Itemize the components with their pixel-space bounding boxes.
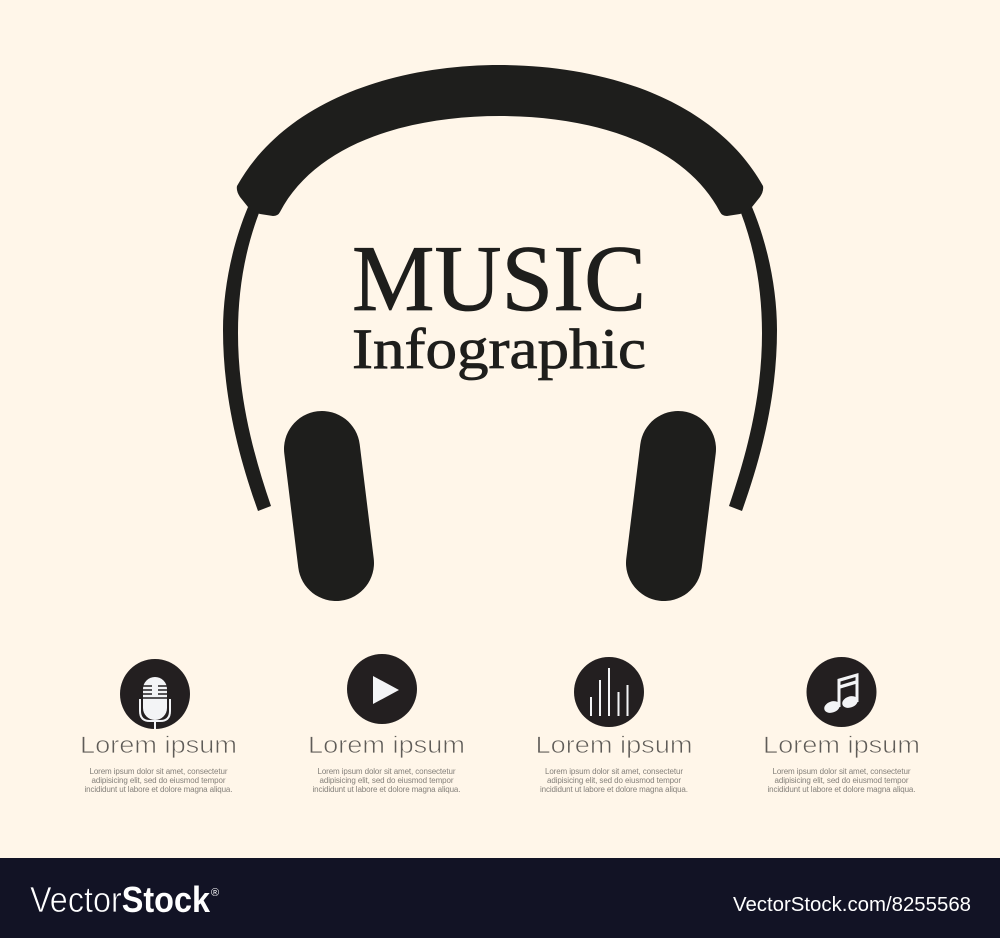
description: adipisicing elit, sed do eiusmod tempor [320,776,454,785]
description: incididunt ut labore et dolore magna aliqua. [768,785,916,794]
description: Lorem ipsum dolor sit amet, consectetur [90,767,228,776]
left wire [223,207,271,511]
title: MUSIC: MUSIC [352,227,646,331]
description: adipisicing elit, sed do eiusmod tempor [547,776,681,785]
description [768,767,916,794]
description: Lorem ipsum dolor sit amet, consectetur [545,767,683,776]
description: Lorem ipsum dolor sit amet, consectetur [772,767,911,776]
description: adipisicing elit, sed do eiusmod tempor [774,776,909,785]
item 3: equalizer [536,657,692,794]
description [540,767,688,794]
registered mark: ® [211,887,219,899]
footer bar [0,858,1000,938]
footer logo: VectorStock [30,879,211,920]
description [312,767,460,794]
icon: microphone [120,659,190,729]
icon: music note [806,657,876,727]
footer id: VectorStock.com/8255568 [733,894,971,916]
headphones illustration [223,65,777,563]
item 1: microphone [80,659,237,794]
icon: equalizer bars [574,657,644,727]
description: incididunt ut labore et dolore magna aliqua. [84,785,232,794]
description: Lorem ipsum dolor sit amet, consectetur [318,767,456,776]
heading: Lorem ipsum [80,732,237,759]
heading: Lorem ipsum [536,732,692,759]
description [84,767,232,794]
item 4: music note [763,657,920,794]
subtitle: Infographic: Infographic [352,318,646,381]
right ear cup [664,449,678,563]
right wire [729,207,777,511]
left ear cup [322,449,336,563]
heading: Lorem ipsum [308,732,465,759]
description: incididunt ut labore et dolore magna aliqua. [540,785,688,794]
icon: play [347,654,417,724]
heading: Lorem ipsum [763,732,920,759]
description: adipisicing elit, sed do eiusmod tempor [92,776,226,785]
description: incididunt ut labore et dolore magna aliqua. [312,785,460,794]
headband [237,65,763,216]
item 2: play [308,654,465,794]
